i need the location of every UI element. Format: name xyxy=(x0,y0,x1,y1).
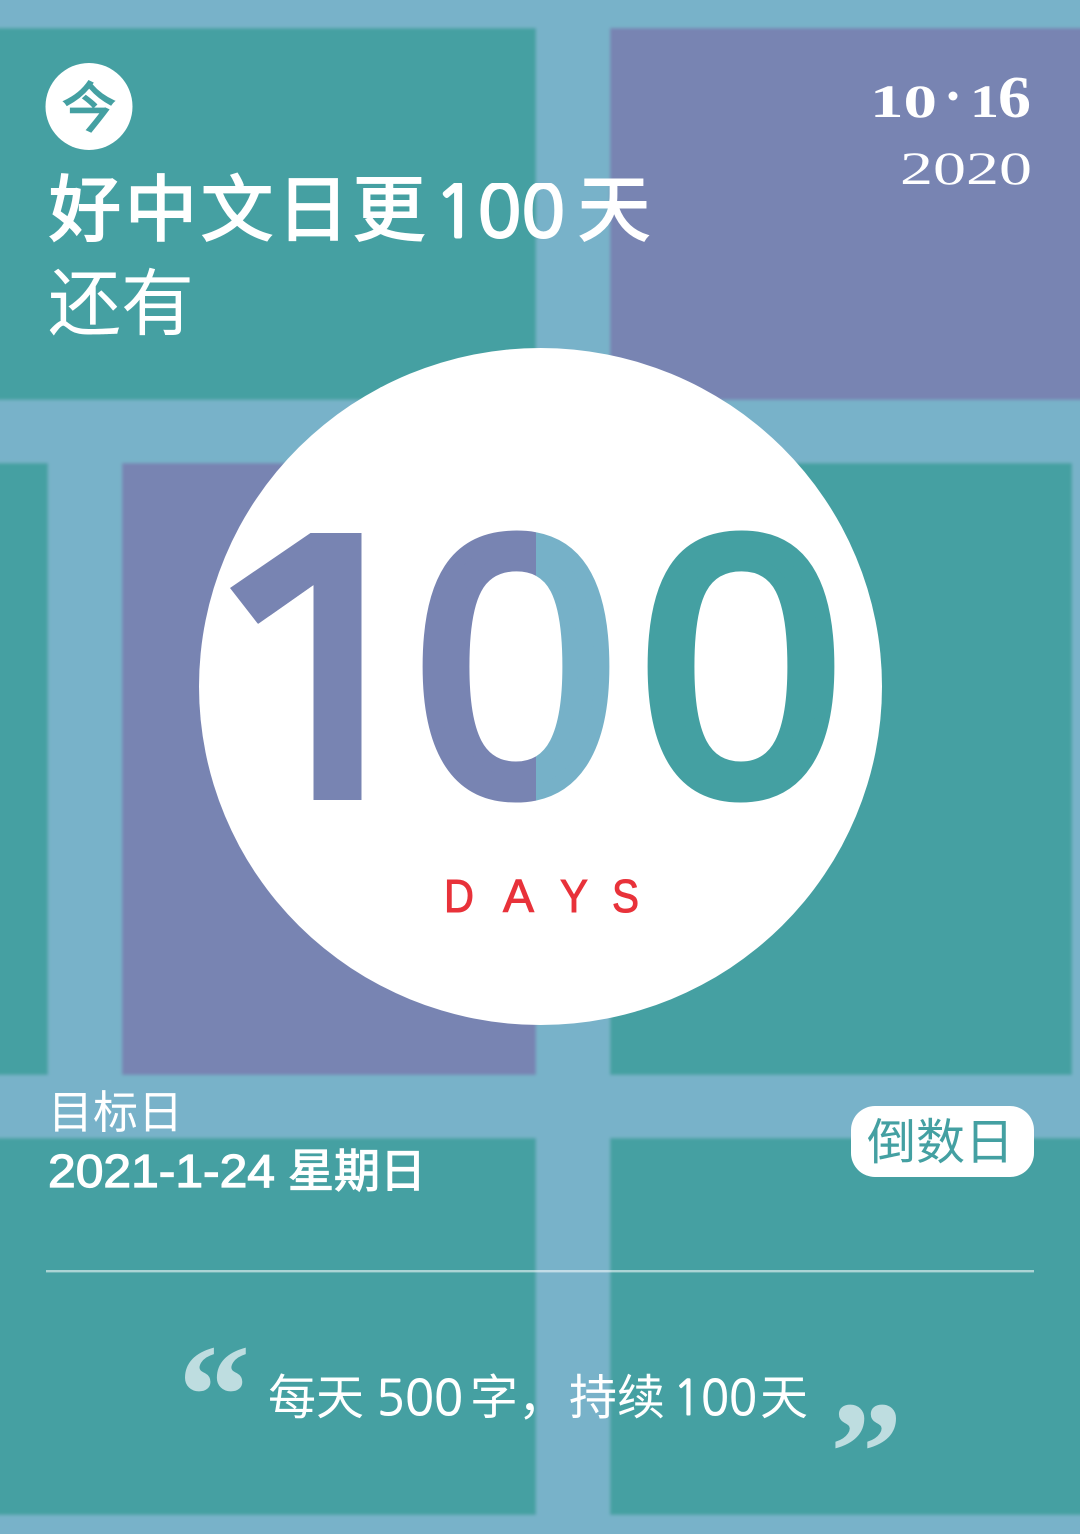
title: 好中文日更 xyxy=(49,171,429,251)
big number 100 xyxy=(173,462,841,880)
big number 100: 0 xyxy=(416,462,616,868)
target date xyxy=(48,1145,426,1197)
title: 天 xyxy=(578,171,650,251)
quote text: 100 xyxy=(673,1374,757,1423)
DAYS label xyxy=(444,870,639,922)
icon: today badge xyxy=(46,63,132,150)
quote text xyxy=(270,1373,806,1420)
subtitle: 还有 xyxy=(48,264,194,345)
title xyxy=(49,172,650,242)
date xyxy=(870,64,1032,195)
tag: countdown day xyxy=(851,1106,1034,1177)
big number 100: 0 xyxy=(641,462,841,868)
date: 2020 xyxy=(900,143,1032,195)
icon: today badge: 今 xyxy=(62,79,116,139)
quote text: 每天 xyxy=(268,1372,364,1425)
date: 1 xyxy=(970,76,999,128)
target date: 星期日 xyxy=(288,1145,426,1197)
title: 100 xyxy=(434,176,565,248)
icon: opening quote mark: “ xyxy=(178,1316,250,1476)
big number 100: 0 xyxy=(416,462,616,868)
target date: 2021-1-24 xyxy=(48,1145,275,1197)
quote text: 500 xyxy=(376,1374,463,1423)
quote text: 持续 xyxy=(569,1372,665,1425)
target date label: 目标日 xyxy=(48,1087,183,1138)
date: 10 xyxy=(870,76,937,128)
quote text: 字， xyxy=(470,1372,566,1425)
tag: countdown day: 倒数日 xyxy=(867,1116,1014,1170)
DAYS label: A xyxy=(503,870,534,922)
date: 6 xyxy=(998,64,1031,130)
quote text: 天 xyxy=(760,1372,808,1425)
quote xyxy=(185,1348,896,1448)
DAYS label: Y xyxy=(560,870,588,922)
DAYS label: S xyxy=(612,870,639,922)
white circle xyxy=(199,348,882,1025)
icon: closing quote mark: ” xyxy=(830,1373,902,1533)
big number 100: 1 xyxy=(173,498,476,880)
DAYS label: D xyxy=(444,870,474,922)
